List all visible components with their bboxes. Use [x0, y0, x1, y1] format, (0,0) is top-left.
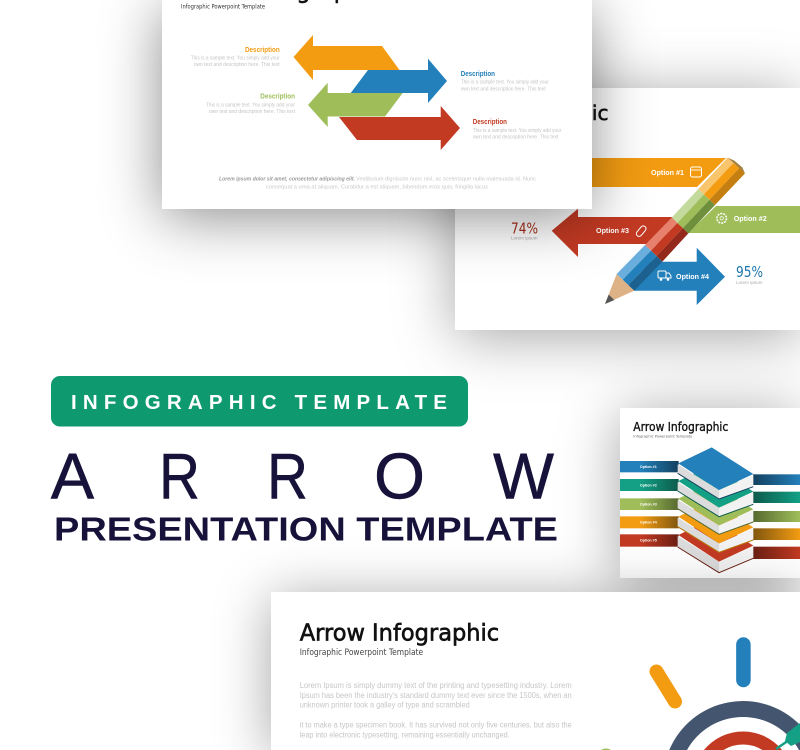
- icon: green pill: [601, 749, 611, 750]
- badge pill and label: [51, 376, 468, 426]
- target rings: [669, 701, 800, 750]
- description: orange: This is a sample text. You simply add your: [191, 56, 280, 62]
- book: red: [678, 519, 753, 573]
- right ribbons: [753, 474, 800, 559]
- left ribbons: Option #1: [640, 465, 657, 469]
- badge pill and label: INFOGRAPHIC TEMPLATE: [71, 391, 447, 414]
- book: orange: [678, 501, 753, 552]
- panel: target slide: [271, 592, 800, 750]
- book: teal: [678, 465, 753, 517]
- body text: leap into electronic typesetting, remaining essentially unchanged.: [300, 730, 510, 739]
- green arrow: [308, 83, 403, 127]
- green bar: option 2: [688, 206, 800, 233]
- footer text: consequat a urna at aliquam. Curabitur a est aliquam, bibendum eros quis, fringilla lacus: [266, 184, 488, 190]
- headline: ARROW: R: [267, 440, 308, 512]
- blue arrow: option 4: Option #4: [676, 272, 710, 281]
- slide subtitle: Infographic Powerpoint Template: [633, 434, 692, 438]
- slide title: Arrow Infographic: [300, 620, 499, 646]
- book: blue: [678, 447, 753, 499]
- headline: ARROW: R: [159, 440, 200, 512]
- body text: it to make a type specimen book. It has survived not only five centuries, but also the: [300, 721, 572, 730]
- red arrow: option 3: [552, 209, 680, 257]
- description: blue: Description: [461, 69, 495, 78]
- panel: books slide: [620, 408, 800, 578]
- red arrow: [339, 106, 460, 150]
- description: green: Description: [260, 92, 295, 100]
- icon: dart: [776, 723, 800, 749]
- slide subtitle: Infographic Powerpoint Template: [181, 4, 265, 10]
- footer text: Vestibulum dignissim nunc nisl, ac scelerisque nulla malesuada id. Nunc: [356, 176, 536, 182]
- description: orange: own text and description here. This text: [194, 62, 280, 68]
- orange bar: option 1: Option #1: [651, 168, 684, 177]
- blue arrow: [351, 59, 447, 103]
- headline: ARROW: A: [51, 440, 95, 512]
- green bar: option 2: Option #2: [734, 214, 767, 223]
- description: green: own text and description here. This text: [209, 109, 296, 115]
- headline: ARROW: O: [374, 440, 425, 512]
- panel: pencil arrows slide: [455, 88, 800, 330]
- slide title: Arrow Infographic: [633, 420, 728, 434]
- stat: 74%: Lorem Ipsum: [511, 236, 538, 240]
- description: green: This is a sample text. You simply add your: [206, 102, 295, 108]
- description: red: own text and description here. This text: [473, 134, 559, 140]
- description: red: Description: [473, 117, 507, 126]
- stat: 95%: 95%: [736, 263, 763, 281]
- description: blue: [461, 69, 549, 92]
- book: green: [678, 483, 753, 534]
- orange arrow: [294, 35, 400, 80]
- headline: ARROW: W: [493, 440, 555, 512]
- orange bar: option 1: [455, 158, 726, 187]
- red arrow: option 3: Option #3: [596, 226, 629, 235]
- body text: unknown printer took a galley of type and scrambled: [300, 701, 470, 710]
- description: red: This is a sample text. You simply add your: [473, 128, 562, 134]
- description: orange: [191, 45, 280, 68]
- left ribbons: [620, 461, 679, 547]
- blue arrow: option 4: [625, 248, 725, 305]
- stat: 95%: Lorem Ipsum: [736, 280, 763, 285]
- headline: ARROW: [51, 440, 555, 512]
- description: orange: Description: [245, 45, 280, 54]
- icon: pencil: [605, 158, 745, 304]
- footer text: Lorem ipsum dolor sit amet, consectetur adipiscing elit.: [219, 176, 355, 182]
- body text: [300, 681, 572, 739]
- description: green: [206, 92, 296, 115]
- body text: Ipsum has been the industry's standard dummy text ever since the 1500s, when an: [300, 691, 572, 700]
- body text: Lorem Ipsum is simply dummy text of the printing and typesetting industry. Lorem: [300, 681, 572, 690]
- description: blue: This is a sample text. You simply add your: [461, 80, 549, 86]
- panel: four arrows slide: [162, 0, 592, 209]
- left ribbons: Option #2: [640, 483, 657, 487]
- book stack with ribbons: [620, 447, 800, 573]
- description: red: [473, 117, 562, 140]
- slide subtitle: Infographic Powerpoint Template: [300, 648, 423, 658]
- footer text: [219, 176, 536, 190]
- left ribbons: Option #3: [640, 503, 657, 507]
- stat: 95%: [736, 263, 763, 285]
- stat: 74%: 74%: [511, 219, 538, 237]
- icon: orange pill: [656, 672, 675, 702]
- left ribbons: Option #5: [640, 539, 657, 543]
- stat: 74%: [511, 219, 538, 240]
- headline: presentation template: PRESENTATION TEMPLATE: [54, 511, 558, 548]
- description: blue: own text and description here. This text: [461, 86, 546, 92]
- left ribbons: Option #4: [640, 521, 658, 525]
- icon: blue pill: [736, 644, 751, 680]
